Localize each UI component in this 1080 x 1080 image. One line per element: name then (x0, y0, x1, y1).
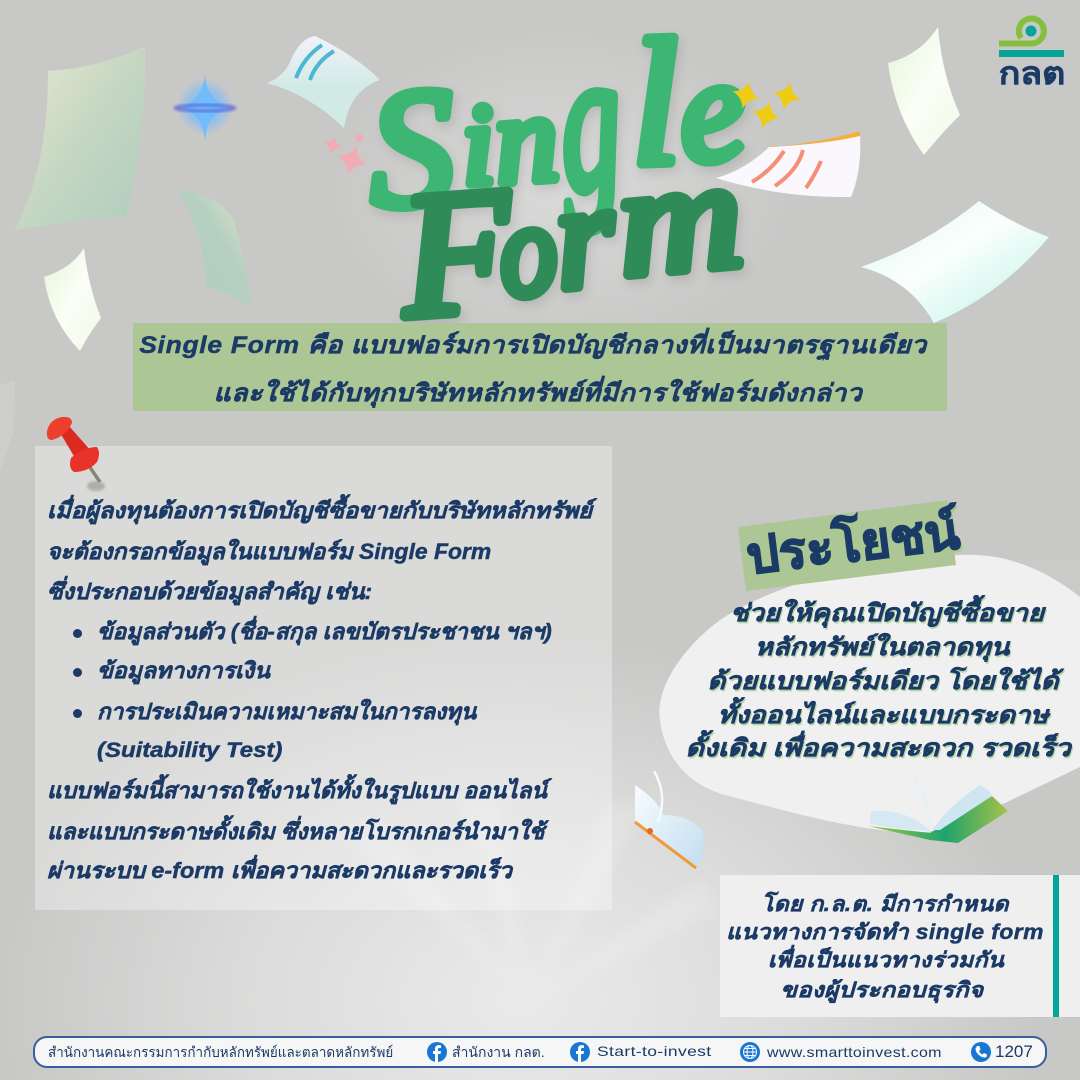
text: intro line 3: ซึ่งประกอบด้วยข้อมูลสำคัญ เช่น: (47, 579, 372, 604)
note box: SEC guidance (720, 875, 1080, 1017)
banner line 1: Single Form คือ แบบฟอร์มการเปิดบัญชีกลางที่เป็นมาตรฐานเดียว (139, 332, 927, 359)
paper: orange edged with salmon strokes (716, 131, 860, 197)
tag text: ประโยชน์ (743, 502, 963, 585)
paper: bottom right (861, 201, 1049, 323)
title: Single Form: o (495, 176, 561, 325)
benefit line 1: ช่วยให้คุณเปิดบัญชีซื้อขาย (730, 600, 1044, 627)
icon: facebook 2 (570, 1042, 590, 1062)
bullet: financial data: ข้อมูลทางการเงิน (97, 658, 270, 683)
title: Single Form (364, 20, 753, 335)
footer: hotline: 1207 (995, 1042, 1033, 1061)
note line 2: แนวทางการจัดทำ single form (726, 921, 1044, 944)
paper: top right (888, 27, 960, 155)
benefit line 3: ด้วยแบบฟอร์มเดียว โดยใช้ได้ (707, 668, 1059, 695)
benefit line 2: หลักทรัพย์ในตลาดทุน (755, 634, 1009, 661)
text: usage line 1: แบบฟอร์มนี้สามารถใช้งานได้ทั้งในรูปแบบ ออนไลน์ (47, 778, 547, 803)
icon: globe (740, 1042, 760, 1062)
title: Single Form: m (611, 128, 749, 309)
banner: definition (133, 323, 947, 411)
icon: blue sparkle (172, 76, 238, 140)
bullet: personal data: ข้อมูลส่วนตัว (ชื่อ-สกุล เลขบัตรประชาชน ฯลฯ) (97, 619, 552, 644)
paper: top with blue strokes (268, 36, 380, 128)
title: Single Form: n (490, 69, 562, 211)
footer: website: www.smarttoinvest.com (767, 1044, 942, 1060)
footer: facebook page 1: สำนักงาน กลต. (452, 1044, 545, 1060)
icon: flying book left (634, 770, 703, 870)
text: usage line 2: และแบบกระดาษดั้งเดิม ซึ่งหลายโบรกเกอร์นำมาใช้ (47, 819, 544, 844)
tag: benefit heading (738, 500, 963, 591)
icon: flying book right (868, 776, 1008, 843)
tag background (738, 500, 956, 591)
banner line 2: และใช้ได้กับทุกบริษัทหลักทรัพย์ที่มีการใช้ฟอร์มดังกล่าว (214, 380, 862, 407)
panel: explanation (35, 446, 612, 910)
icon: yellow sparkles (732, 82, 800, 128)
text: intro line 2: จะต้องกรอกข้อมูลในแบบฟอร์ม Single Form (47, 539, 491, 564)
note line 4: ของผู้ประกอบธุรกิจ (781, 979, 983, 1002)
paper: large left (14, 46, 146, 231)
title: Single Form: i (459, 80, 497, 209)
icon: pink sparkles (324, 132, 366, 174)
footer: organisation name: สำนักงานคณะกรรมการกำกับหลักทรัพย์และตลาดหลักทรัพย์ (48, 1044, 393, 1060)
title: Single Form: S (364, 52, 459, 244)
paper: white-green lower left (44, 248, 101, 351)
note line 3: เพื่อเป็นแนวทางร่วมกัน (768, 949, 1004, 972)
accent bar (1053, 875, 1059, 1017)
paper: small sage (176, 190, 251, 308)
icon: red pushpin (46, 416, 106, 492)
footer: facebook page 2: Start-to-invest (597, 1043, 712, 1059)
bullet: suitability: การประเมินความเหมาะสมในการลงทุน (97, 699, 476, 724)
icon: phone (971, 1042, 991, 1062)
text: intro line 1: เมื่อผู้ลงทุนต้องการเปิดบัญชีซื้อขายกับบริษัทหลักทรัพย์ (47, 498, 592, 523)
benefit line 5: ดั้งเดิม เพื่อความสะดวก รวดเร็ว (685, 735, 1071, 762)
text: usage line 3: ผ่านระบบ e-form เพื่อความสะดวกและรวดเร็ว (47, 858, 512, 883)
text: benefit description (685, 594, 1073, 762)
icon: facebook 1 (427, 1042, 447, 1062)
title: Single Form: e (670, 26, 753, 196)
blob: benefit background (660, 554, 1080, 832)
note line 1: โดย ก.ล.ต. มีการกำหนด (761, 893, 1009, 916)
footer: contact bar (33, 1036, 1047, 1068)
logo text: กลต (999, 56, 1065, 91)
title: Single Form: r (549, 152, 622, 321)
logo mark (999, 15, 1064, 57)
logo: SEC Thailand (999, 15, 1065, 91)
benefit line 4: ทั้งออนไลน์และแบบกระดาษ (718, 702, 1048, 729)
bullet continuation: (Suitability Test) (97, 739, 282, 762)
